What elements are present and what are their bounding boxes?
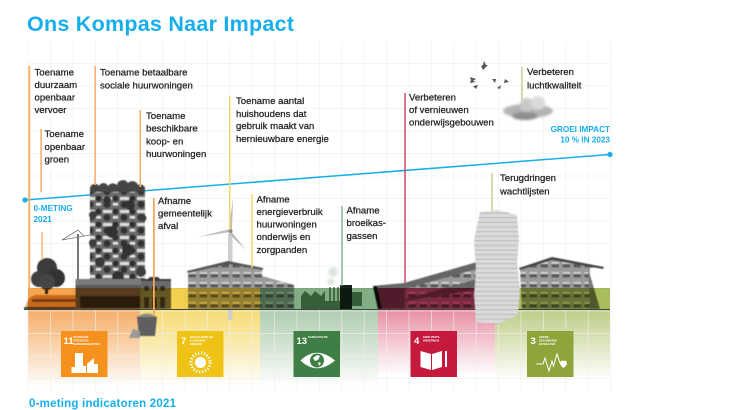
crane <box>62 230 90 280</box>
SDG 11 tile <box>61 331 108 377</box>
SDG 7 tile: DUURZAME <box>190 338 206 342</box>
section heading: 0-meting indicatoren 2021 <box>29 398 177 410</box>
indicator: municipal waste: gemeentelijk <box>158 208 212 220</box>
tree <box>31 258 65 294</box>
SDG 3 tile: GEZONDHEID <box>539 338 557 342</box>
SDG 13 tile: 13 <box>296 336 307 347</box>
SDG 11 tile: STEDEN EN <box>73 338 88 342</box>
paper stack <box>474 210 520 324</box>
SDG 4 tile: ONDERWIJS <box>423 338 439 342</box>
indicator: energy use: energieverbruik <box>256 207 323 218</box>
indicator: social housing: Toename betaalbare <box>100 68 187 78</box>
colour band green <box>260 288 378 309</box>
indicator: energy use: Afname <box>256 194 290 206</box>
apartment building red section <box>373 262 477 309</box>
SDG 11 tile: GEMEENSCHAPPEN <box>73 342 100 346</box>
indicator: owner and rental housing: koop- en <box>146 136 183 148</box>
wind turbine <box>198 198 246 320</box>
ground line <box>24 308 610 310</box>
indicator: social housing: sociale huurwoningen <box>100 80 193 92</box>
label: baseline measurement: 0-METING <box>34 204 73 213</box>
SDG 3 tile <box>527 331 574 377</box>
apartment building left <box>187 261 294 309</box>
SDG 13 tile: KLIMAATACTIE <box>308 335 328 339</box>
birds <box>470 61 509 89</box>
colour band orange <box>28 288 140 309</box>
indicator: owner and rental housing: beschikbare <box>146 124 198 134</box>
label: growth impact: 10 % IN 2023 <box>560 136 610 144</box>
cloud <box>503 96 553 120</box>
SDG 4 tile: 4 <box>414 336 420 347</box>
indicator: renewable energy: gebruik maakt van <box>236 121 314 132</box>
indicator: owner and rental housing <box>140 110 206 187</box>
indicator: air quality <box>521 67 582 101</box>
residential tower with greenery <box>89 180 146 288</box>
indicator: school buildings: of vernieuwen <box>409 105 469 116</box>
gradient colour zones below the ground line <box>28 310 610 386</box>
indicator: energy use: huurwoningen <box>256 220 317 230</box>
SDG 7 tile: ENERGIE <box>190 342 202 346</box>
SDG 7 tile: BETAALBARE EN <box>190 335 213 339</box>
indicator: public transport <box>28 66 77 290</box>
indicator: air quality: luchtkwaliteit <box>527 80 582 92</box>
SDG 13 tile <box>294 331 340 377</box>
label: growth impact: GROEI IMPACT <box>551 125 610 134</box>
indicator: energy use: zorgpanden <box>256 245 307 256</box>
SDG 7 tile: 7 <box>181 336 186 347</box>
indicator: waiting lists <box>491 173 556 211</box>
indicator: school buildings <box>404 92 494 283</box>
indicator: public green: openbaar <box>44 142 86 153</box>
indicator: municipal waste: afval <box>158 221 178 232</box>
SDG 11 tile: DUURZAME <box>73 335 89 339</box>
label: baseline measurement: 2021 <box>34 215 52 224</box>
low building and town houses <box>76 277 171 309</box>
indicator: social housing <box>94 66 193 185</box>
indicator: owner and rental housing: Toename <box>146 111 185 122</box>
grid <box>28 42 610 392</box>
apartment building right <box>519 257 604 309</box>
title: Ons Kompas Naar Impact <box>27 12 294 36</box>
SDG 7 tile <box>177 331 224 377</box>
indicator: public transport: vervoer <box>34 105 67 116</box>
indicator: waiting lists: wachtlijsten <box>499 186 550 198</box>
SDG 4 tile <box>410 331 457 377</box>
indicator: energy use <box>251 194 323 268</box>
indicator: municipal waste <box>153 196 212 316</box>
SDG 11 tile: 11 <box>64 336 74 347</box>
indicator: public green: groen <box>44 154 69 166</box>
indicator: greenhouse gases: Afname <box>346 206 380 216</box>
indicator: renewable energy: Toename aantal <box>236 96 304 107</box>
indicator: owner and rental housing: huurwoningen <box>146 149 206 160</box>
indicator: public green: Toename <box>44 129 84 140</box>
indicator: school buildings: Verbeteren <box>409 92 456 104</box>
indicator: public green <box>40 129 86 260</box>
colour band red <box>378 288 495 309</box>
colour band olive <box>517 288 610 309</box>
colour band yellow <box>140 288 260 309</box>
train <box>24 295 76 309</box>
indicator: greenhouse gases: broeikas- <box>346 218 386 229</box>
SDG 4 tile: KWALITEITS- <box>423 335 440 339</box>
waste container <box>129 314 157 338</box>
indicator: public transport: openbaar <box>34 92 76 104</box>
indicator: renewable energy: hernieuwbare energie <box>236 134 329 145</box>
indicator: renewable energy: huishoudens dat <box>236 109 307 120</box>
indicator: municipal waste: Afname <box>158 196 191 207</box>
indicator: greenhouse gases <box>341 206 386 286</box>
SDG 3 tile: EN WELZIJN <box>539 342 555 346</box>
indicator: energy use: onderwijs en <box>256 232 310 243</box>
indicator: public transport: Toename <box>34 68 74 78</box>
indicator: public transport: duurzaam <box>34 80 77 91</box>
indicator: school buildings: onderwijsgebouwen <box>409 118 494 128</box>
growth line <box>22 152 613 203</box>
SDG 3 tile: GOEDE <box>539 335 549 339</box>
indicator: greenhouse gases: gassen <box>346 231 377 242</box>
indicator: renewable energy <box>229 96 329 230</box>
SDG 3 tile: 3 <box>530 336 536 347</box>
indicator: air quality: Verbeteren <box>527 67 574 78</box>
indicator: waiting lists: Terugdringen <box>500 173 556 184</box>
factory with smoke <box>301 267 362 309</box>
